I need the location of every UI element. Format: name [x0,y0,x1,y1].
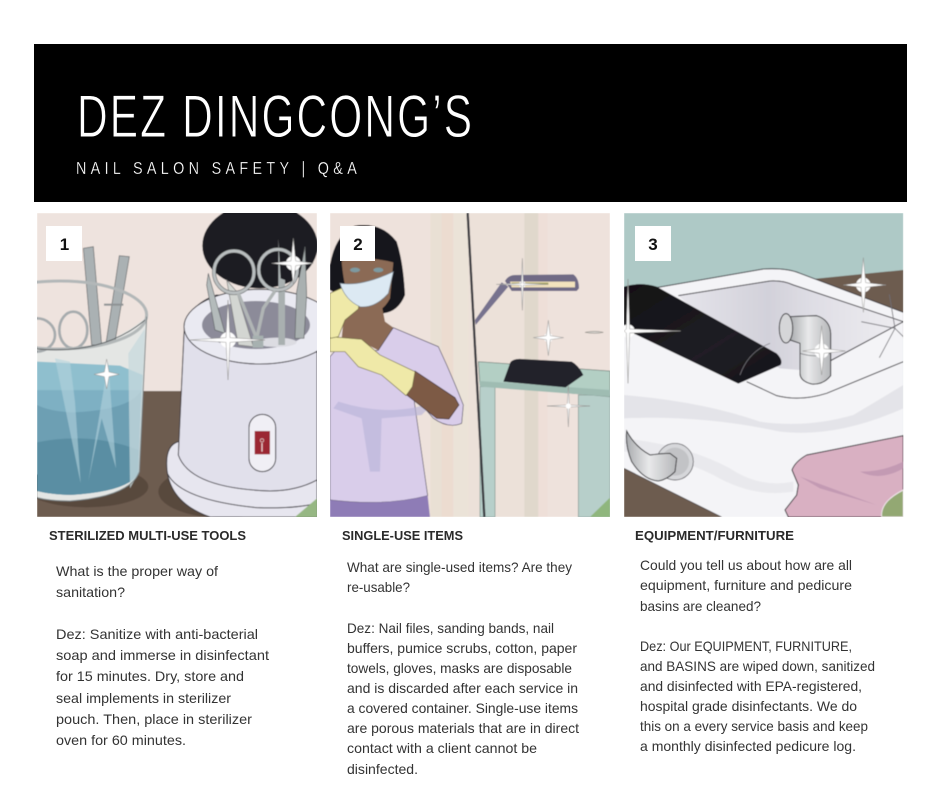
text block: equipment answer: and BASINS are wiped down, sanitized [640,658,875,674]
text block: sanitation answer: soap and immerse in disinfectant [56,647,269,663]
text block: single-use answer: re-usable? [347,579,410,595]
text block: single-use answer: and is discarded after each service in [347,680,578,696]
title: DEZ DINGCONG’S [77,84,474,151]
text block: equipment answer: hospital grade disinfectants. We do [640,698,857,714]
text block: single-use answer [347,559,579,777]
icon: sparkle on glass [94,359,119,389]
badge: number 1: 1 [60,235,69,254]
subtitle: NAIL SALON SAFETY | Q&A [76,159,357,178]
text block: equipment answer: and disinfected with EPA-registered, [640,678,862,694]
panel 1: sterilized tools illustration [37,213,317,517]
text block: single-use answer: contact with a client cannot be [347,740,537,756]
text block: equipment answer: basins are cleaned? [640,598,761,614]
icon: black neck rest [624,284,781,384]
icon: pink towel [785,436,903,517]
text block: sanitation answer [56,563,269,748]
icon: lamp [475,274,579,325]
text block: sanitation answer: What is the proper way of [56,563,218,579]
heading: equipment/furniture: EQUIPMENT/FURNITURE [635,528,794,543]
icon: table and legs [478,362,610,517]
icon: faucet [779,314,831,384]
woman in mask and gloves [330,225,463,517]
icon: wall hook [626,431,693,481]
header banner [34,44,907,202]
text block: single-use answer: buffers, pumice scrubs, cotton, paper [347,640,577,656]
icon: tools in sterilizer [207,238,307,348]
heading: sterilized multi-use tools: STERILIZED MULTI-USE TOOLS [49,528,246,543]
icon: glass of disinfectant [37,246,148,502]
icon: black armrest [503,359,583,387]
panel 3: equipment and furniture illustration [621,213,903,517]
text block: equipment answer: this on a every service basis and keep [640,718,868,734]
text block: equipment answer: equipment, furniture and pedicure [640,577,852,593]
text block: sanitation answer: for 15 minutes. Dry, store and [56,668,244,684]
icon: sterilizer body [167,289,336,517]
panel 2: single-use items illustration [330,213,610,517]
text block: single-use answer: What are single-used items? Are they [347,559,572,575]
badge: number 3: 3 [648,235,658,254]
text block: equipment answer: Dez: Our EQUIPMENT, FURNITURE, [640,638,852,654]
icon: pole [468,213,484,517]
text block: single-use answer: Dez: Nail files, sanding bands, nail [347,620,554,636]
icon: sparkles [496,258,603,427]
text block: equipment answer [640,557,875,754]
text block: single-use answer: are porous materials that are in direct [347,720,579,736]
text block: sanitation answer: pouch. Then, place in sterilizer [56,711,252,727]
text block: equipment answer: a monthly disinfected pedicure log. [640,738,856,754]
text block: sanitation answer: oven for 60 minutes. [56,732,186,748]
badge: number 1 [46,226,82,261]
text block: sanitation answer: seal implements in sterilizer [56,690,231,706]
text block: single-use answer: towels, gloves, masks are disposable [347,660,572,676]
badge: number 3 [635,226,671,261]
badge: number 2: 2 [353,235,363,254]
text block: single-use answer: a covered container. Single-use items [347,700,578,716]
text block: sanitation answer: sanitation? [56,584,125,600]
icon: pedicure basin [624,269,903,517]
icon: sparkles on sterilizer [190,238,313,380]
text block: sanitation answer: Dez: Sanitize with anti-bacterial [56,626,258,642]
heading: single-use items: SINGLE-USE ITEMS [342,528,463,543]
icon: sterilizer lid [202,213,317,290]
text block: single-use answer: disinfected. [347,761,418,777]
text block: equipment answer: Could you tell us about how are all [640,557,852,573]
badge: number 2 [340,226,375,261]
icon: sparkles [621,258,903,383]
icon: power switch [249,414,276,472]
